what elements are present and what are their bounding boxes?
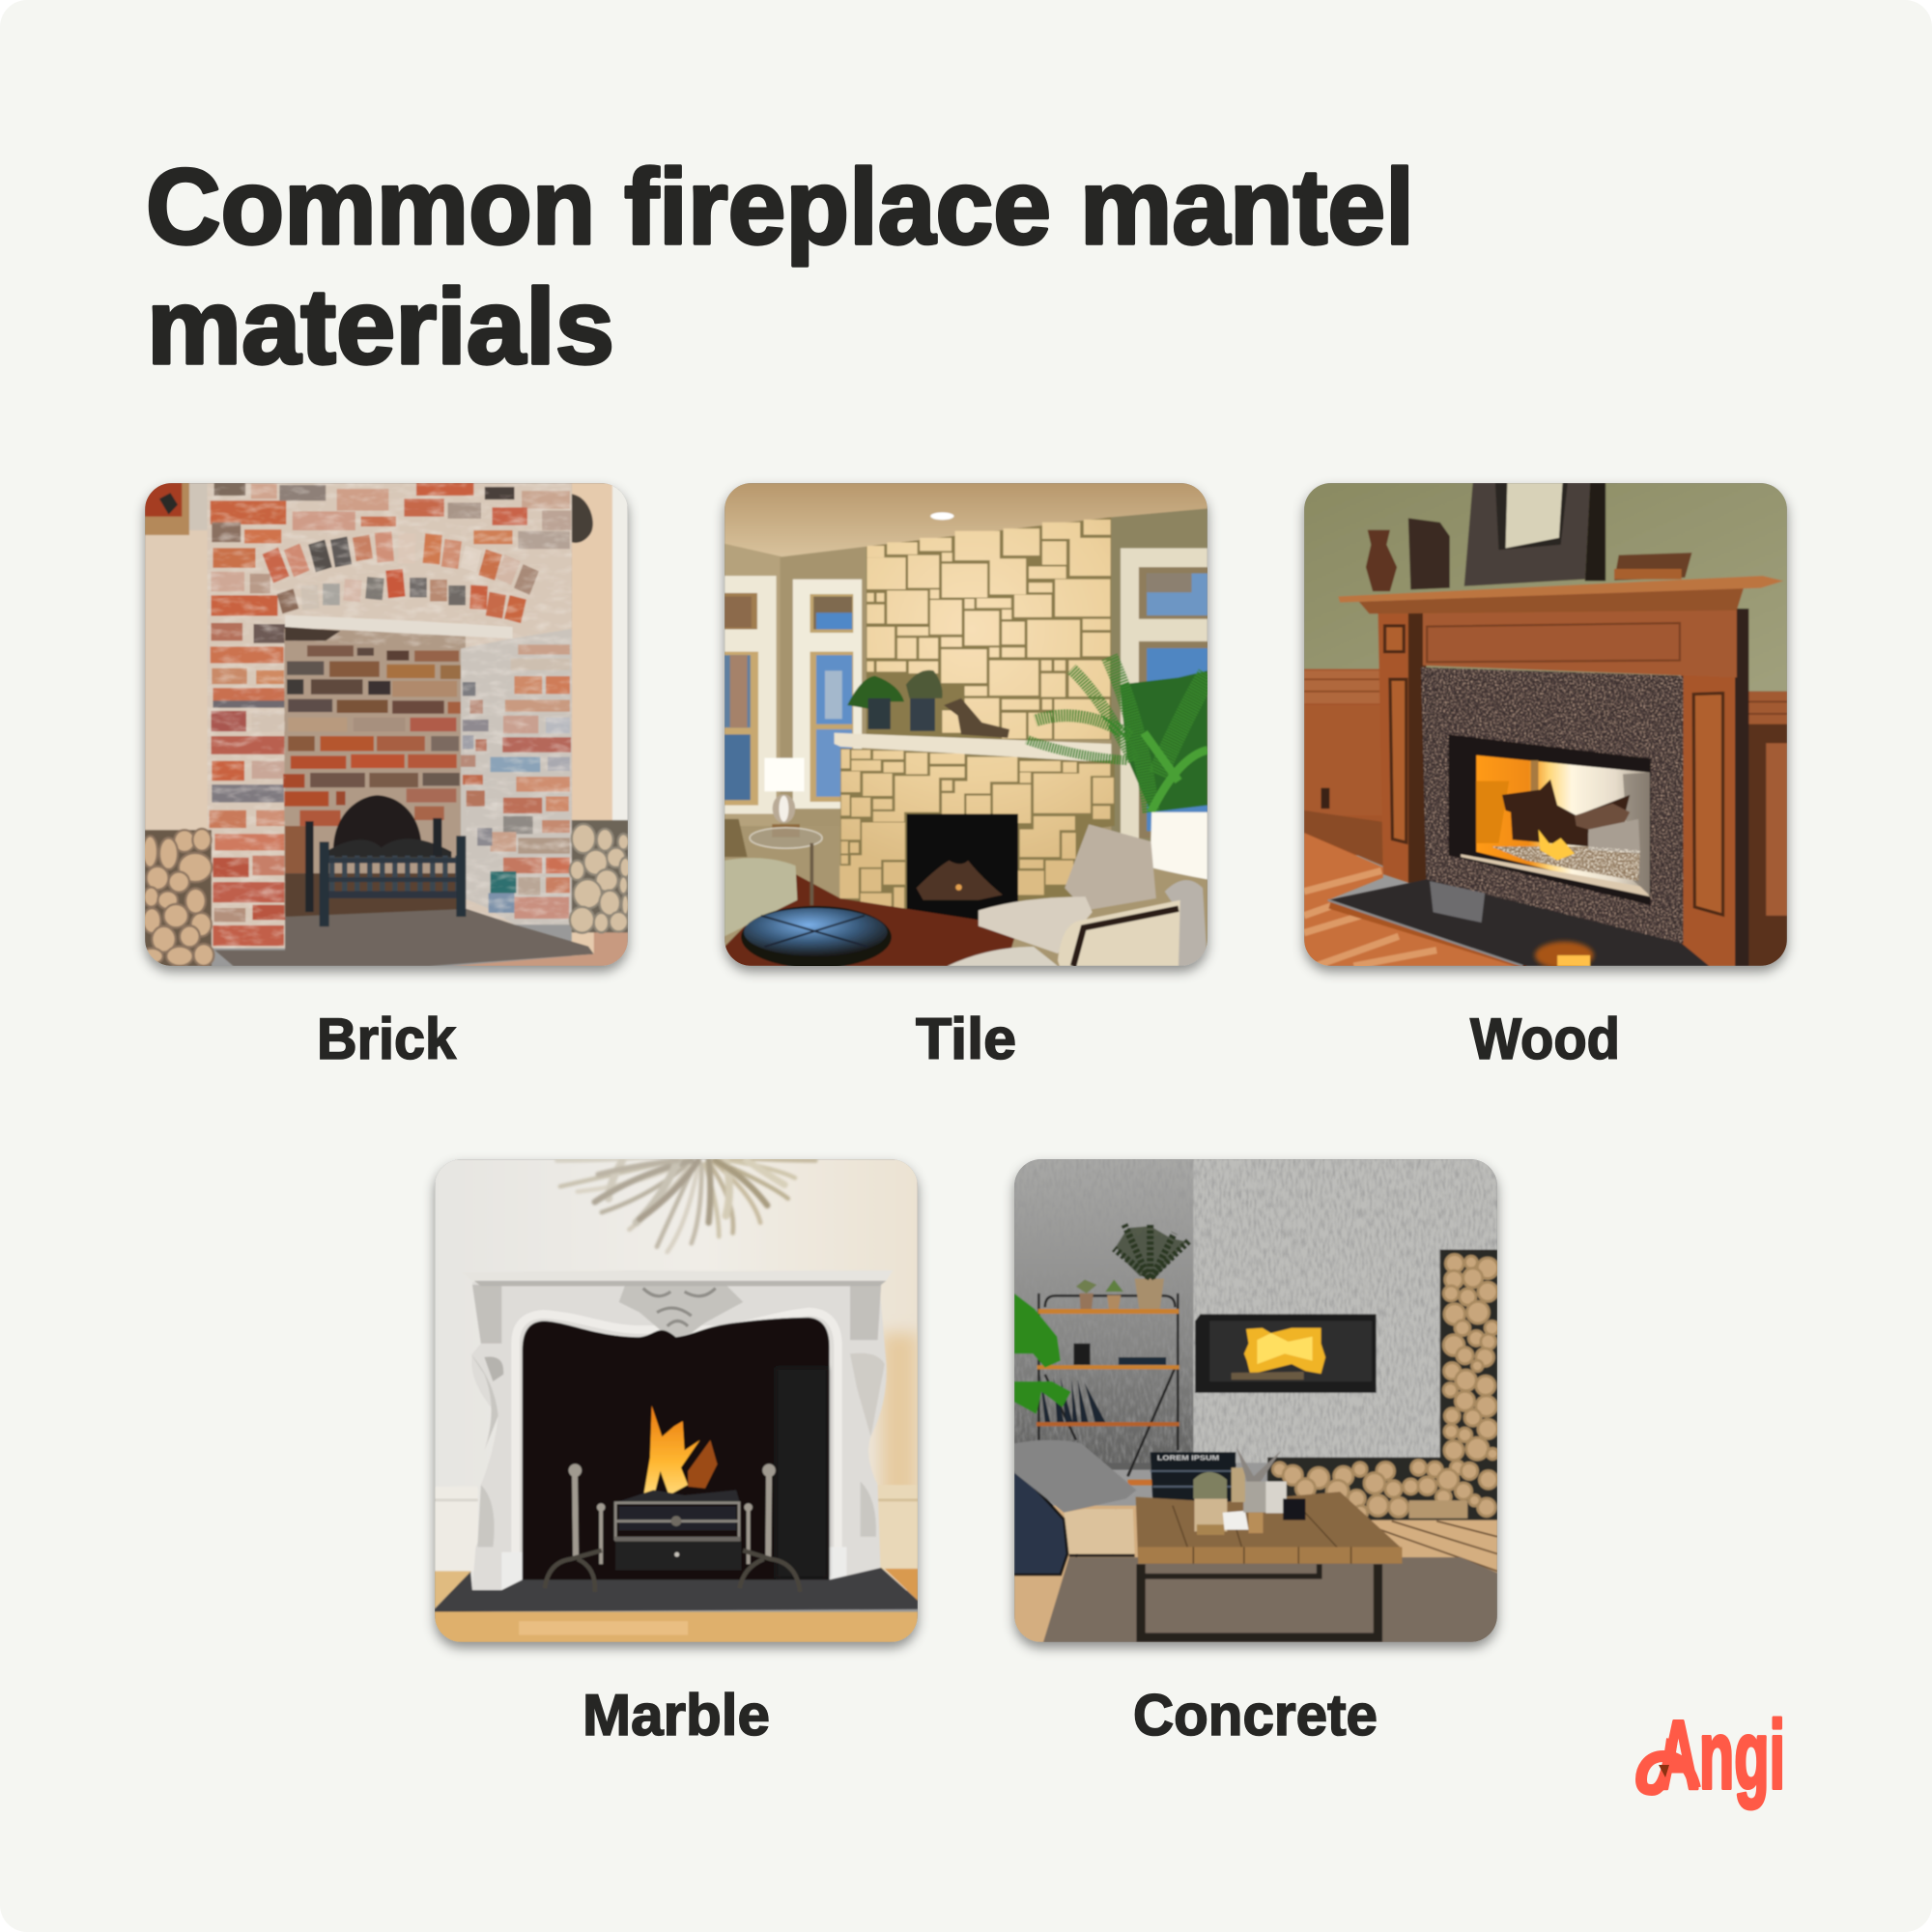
brick photo: framed picture and wall plate bbox=[145, 483, 593, 543]
marble photo: fire basket bbox=[614, 1490, 742, 1570]
concrete photo: wall texture bbox=[1014, 1159, 1497, 1463]
concrete photo: left foliage bbox=[1014, 1293, 1071, 1414]
brick photo: chimney top bricks bbox=[214, 483, 571, 549]
marble photo: warm wall right bbox=[881, 1333, 918, 1575]
wood photo: right wainscot bbox=[1740, 692, 1787, 966]
wood photo: pillar panels bbox=[1385, 624, 1724, 915]
brick photo: left log stack bbox=[141, 829, 213, 966]
tile photo: lower stone wall bbox=[840, 749, 1115, 912]
wood photo: burning logs bbox=[1502, 780, 1630, 846]
concrete photo: front wall bbox=[1193, 1159, 1497, 1463]
wood photo: fire glow bbox=[1476, 755, 1650, 895]
marble photo: inner frame highlight bbox=[516, 1312, 838, 1590]
wood photo: vase bbox=[1366, 530, 1397, 591]
tile photo: ceiling light bbox=[930, 512, 954, 520]
label: Wood: Wood bbox=[1470, 1007, 1620, 1071]
wood photo: left wainscot bbox=[1304, 668, 1387, 867]
tile photo: potted plants and sculpture bbox=[847, 670, 1009, 738]
tile photo: fern bbox=[1027, 657, 1208, 812]
brick photo: chimney bricks left bbox=[210, 500, 287, 946]
wood photo: inner shadow column bbox=[1476, 760, 1650, 895]
tile photo: left windows bbox=[724, 576, 862, 813]
concrete photo: books stack bbox=[1151, 1452, 1236, 1504]
concrete photo: vertical log pile bbox=[1443, 1255, 1498, 1460]
brick photo: plaster wall bbox=[145, 483, 628, 966]
wood photo: olive wall bbox=[1304, 483, 1787, 696]
tile photo: upper stone wall bbox=[867, 517, 1111, 740]
tile photo: floor bbox=[724, 874, 1018, 966]
logo: Angi bbox=[1641, 1701, 1785, 1809]
concrete photo: log crate bbox=[1409, 1500, 1467, 1519]
logo wordmark: Angi bbox=[1658, 1701, 1785, 1809]
brick photo: iron fire basket bbox=[305, 795, 466, 926]
tile photo: side table and lamp bbox=[750, 758, 822, 905]
tile photo: walls bbox=[724, 483, 1208, 966]
wood photo: small flame bbox=[1538, 830, 1575, 861]
concrete photo: wooden shelves bbox=[1037, 1309, 1179, 1486]
wood photo: firebox bbox=[1449, 734, 1651, 905]
wood photo: granite surround bbox=[1421, 668, 1683, 943]
wood photo: mantel shelf bbox=[1338, 576, 1783, 613]
concrete photo: horizontal log pile bbox=[1273, 1460, 1497, 1520]
concrete photo: books stack: LOREM IPSUM bbox=[1157, 1454, 1219, 1462]
tile photo: armchairs bbox=[948, 824, 1180, 966]
marble photo: hearth slab bbox=[435, 1568, 918, 1612]
concrete photo: small plants bbox=[1076, 1280, 1123, 1309]
marble photo: leg shadows and carvings bbox=[470, 1285, 885, 1590]
tile photo: left sofa bbox=[724, 819, 797, 936]
wood photo: floor reflection of fire bbox=[1535, 942, 1594, 969]
concrete photo: left wall bbox=[1014, 1159, 1196, 1469]
brick photo: hearth stone bbox=[214, 909, 594, 966]
tile photo: right window bbox=[1121, 549, 1208, 838]
tile photo: ceiling bbox=[724, 483, 1208, 556]
marble photo: center carving bbox=[619, 1283, 743, 1337]
marble photo: feather sculpture bbox=[556, 1153, 815, 1252]
brick photo: arch bricks bbox=[270, 532, 531, 621]
tile photo: right lamp bbox=[1151, 812, 1208, 966]
label: Marble: Marble bbox=[582, 1683, 770, 1747]
brick photo: right return bricks bbox=[461, 644, 571, 919]
concrete photo: shelf items bbox=[1039, 1344, 1166, 1422]
brick photo: soot under lintel bbox=[285, 627, 341, 640]
marble photo: wood floor bbox=[435, 1569, 918, 1642]
concrete photo: shelf frame bbox=[1038, 1293, 1178, 1476]
wood photo: clock frame bbox=[1464, 483, 1605, 586]
title bbox=[146, 148, 1414, 386]
marble photo: flames bbox=[643, 1406, 717, 1498]
brick photo: right return wall bbox=[461, 629, 572, 924]
brick photo: firebox interior bbox=[284, 629, 466, 917]
title: materials bbox=[147, 268, 614, 386]
tile photo: lower stones bbox=[839, 750, 1114, 908]
concrete photo: fireplace bbox=[1195, 1314, 1377, 1393]
concrete photo: table top bbox=[1136, 1492, 1402, 1564]
label: Tile: Tile bbox=[916, 1007, 1016, 1071]
concrete photo: table legs bbox=[1141, 1564, 1378, 1637]
wood photo: books bbox=[1408, 518, 1691, 589]
marble photo: mantel body bbox=[471, 1282, 887, 1590]
panel: tile bbox=[724, 483, 1208, 968]
marble photo: andiron left bbox=[545, 1463, 605, 1592]
concrete photo: table planks bbox=[1138, 1506, 1402, 1564]
panel: wood bbox=[1304, 483, 1787, 969]
marble photo: firebox right side bbox=[776, 1368, 828, 1578]
concrete photo: floor boards bbox=[1014, 1506, 1497, 1642]
label: Concrete: Concrete bbox=[1133, 1683, 1378, 1747]
panel: brick bbox=[141, 483, 631, 966]
brick photo: firebox back bricks bbox=[283, 645, 463, 917]
logo swash bbox=[1641, 1739, 1695, 1790]
title: Common fireplace mantel bbox=[146, 148, 1414, 267]
wood photo: stones in fire bed bbox=[1492, 819, 1640, 881]
wood photo: mantel pillars bbox=[1378, 602, 1748, 966]
tile photo: mantel shelf bbox=[835, 733, 1111, 761]
label: Brick: Brick bbox=[317, 1007, 457, 1071]
concrete photo: log niche bbox=[1267, 1250, 1497, 1520]
brick photo: right log stack bbox=[570, 820, 631, 933]
tile photo: leather ottoman bbox=[741, 906, 892, 968]
brick photo: chimney mortar bbox=[208, 483, 572, 949]
tile photo: fireplace bbox=[907, 813, 1018, 924]
concrete photo: large plant bbox=[1114, 1223, 1190, 1309]
wood photo: plank floor bbox=[1304, 833, 1526, 966]
brick photo: lintel bbox=[285, 615, 513, 639]
wood photo: frieze bbox=[1423, 604, 1737, 677]
brick photo: floor bbox=[451, 932, 628, 966]
wood photo: hearth slab bbox=[1328, 879, 1709, 966]
concrete photo: cactus and ornaments bbox=[1193, 1447, 1305, 1535]
marble photo: skirting bbox=[435, 1485, 918, 1571]
marble photo: mantel shelf bbox=[462, 1270, 894, 1286]
wood photo: ledge bbox=[1461, 854, 1651, 896]
marble photo: andiron right bbox=[740, 1463, 800, 1592]
concrete photo: rug bbox=[1043, 1557, 1497, 1642]
marble photo: wall bbox=[435, 1159, 918, 1590]
panel: marble bbox=[435, 1153, 918, 1642]
panel: concrete bbox=[1014, 1159, 1498, 1642]
tile photo: upper stones bbox=[867, 520, 1111, 739]
concrete photo: lounge chair and pillow bbox=[1014, 1440, 1136, 1575]
brick photo: whitewash texture bbox=[208, 483, 572, 949]
logo fold bbox=[1659, 1765, 1669, 1777]
marble photo: firebox opening bbox=[523, 1318, 830, 1588]
